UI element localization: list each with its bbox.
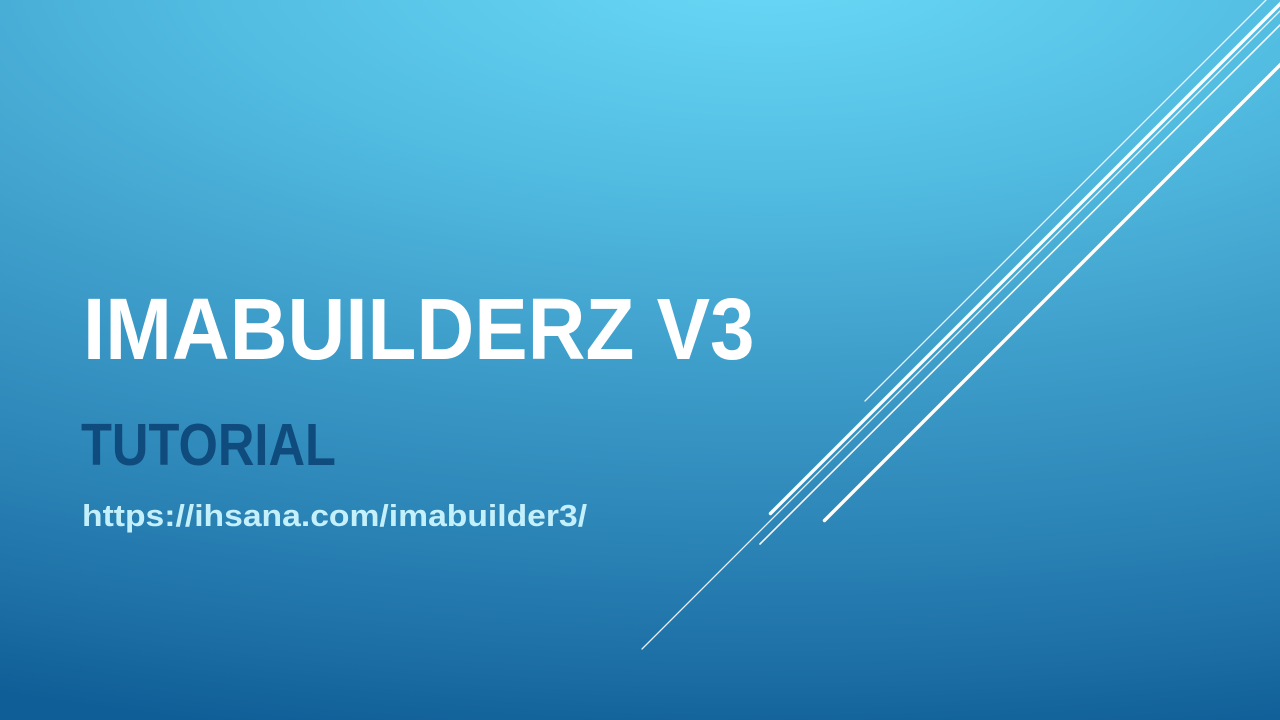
- subtitle: TUTORIAL: [81, 412, 336, 478]
- title: IMABUILDERZ V3: [83, 281, 754, 378]
- url link text: https://ihsana.com/imabuilder3/: [82, 498, 587, 533]
